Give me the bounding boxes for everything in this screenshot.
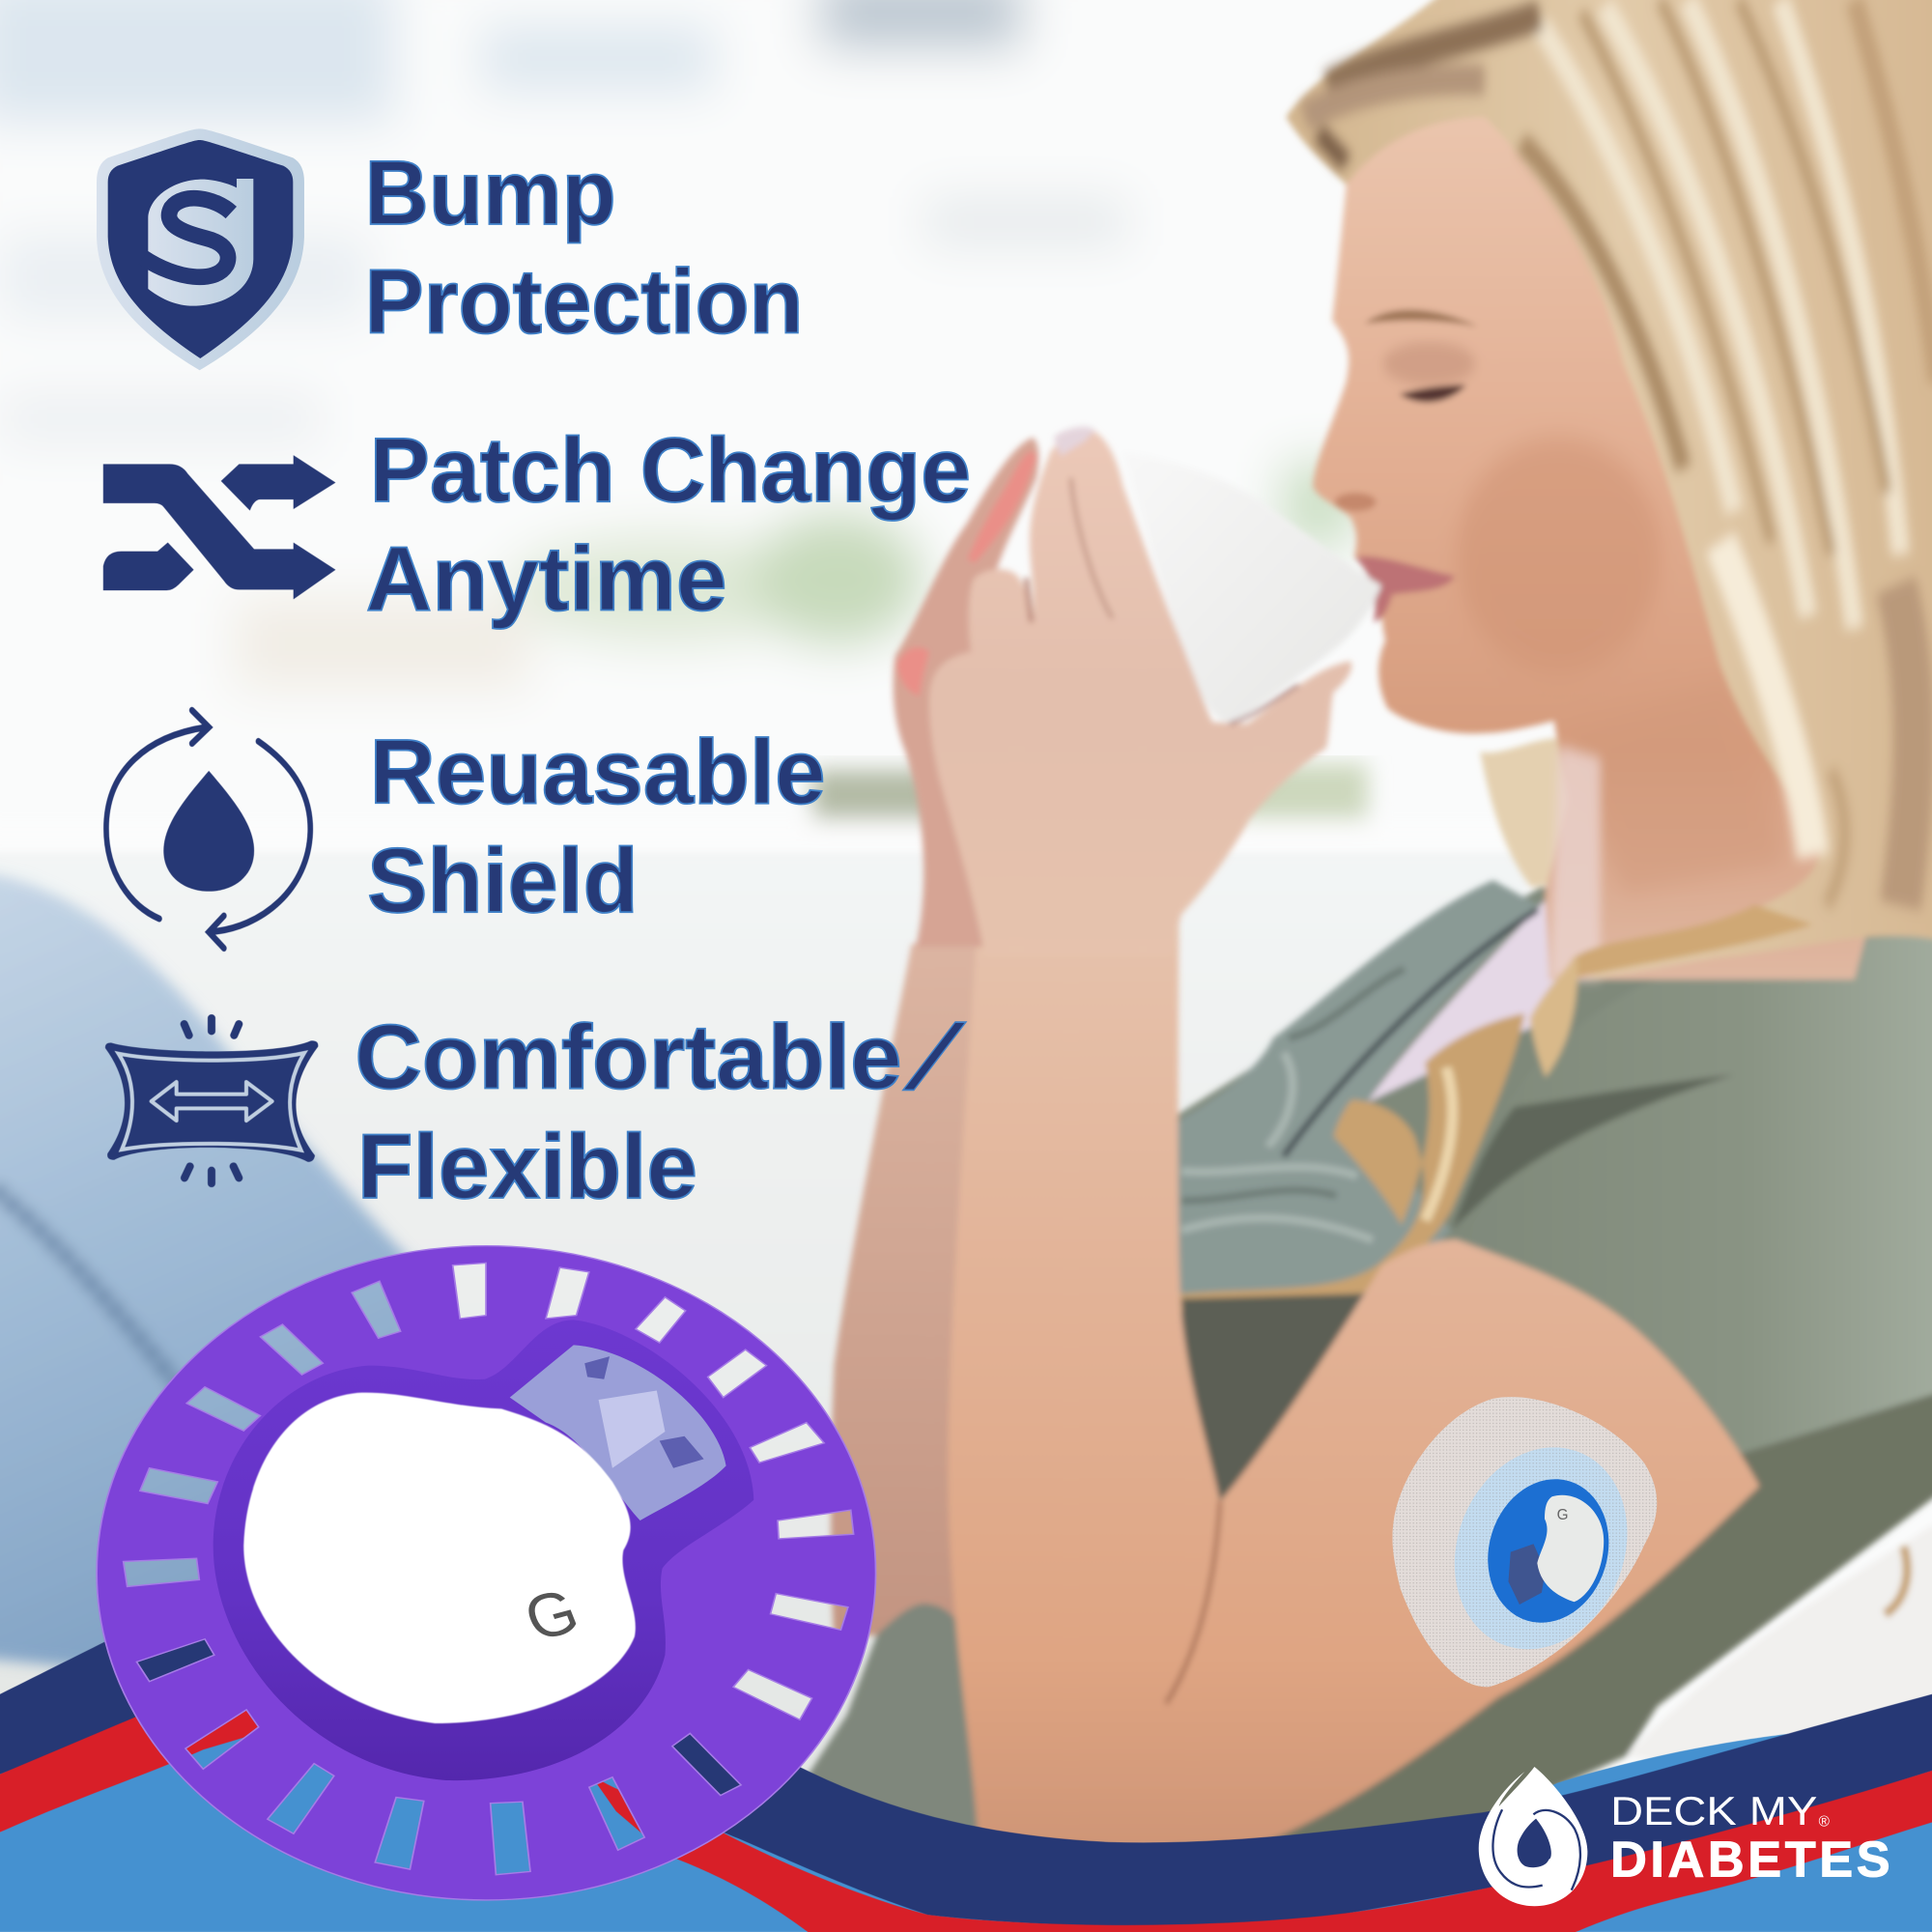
heading line 2: Shield <box>367 831 639 932</box>
raised rim <box>213 1320 753 1780</box>
mug <box>1122 452 1381 724</box>
icon: cycle with drop <box>106 710 310 949</box>
dark shirt under arm <box>1181 1293 1381 1548</box>
heading line 2: Flexible <box>357 1117 697 1218</box>
icon: stretch pillow <box>105 1018 318 1183</box>
jeans <box>0 872 425 1676</box>
light blue ring <box>1425 1421 1657 1675</box>
lips, eye, brow <box>1355 310 1478 622</box>
far arm <box>831 944 985 1637</box>
sensor logo letter: G <box>515 1576 588 1654</box>
feature: Comfortable / Flexible <box>105 1006 976 1218</box>
adhesive patch <box>1392 1397 1657 1687</box>
hair behind neck <box>1480 738 1577 887</box>
lower shirt <box>804 1604 994 1853</box>
logo: Deck My Diabetes: ® <box>1819 1813 1831 1830</box>
cushion and dark shirt band <box>1233 1386 1932 1861</box>
logo wordmark: DECK MY <box>1610 1788 1817 1833</box>
sensor letter: G <box>1557 1507 1569 1523</box>
feature: Reuasable Shield <box>106 710 826 949</box>
sensor window <box>510 1345 726 1520</box>
heading line 2: Protection <box>365 251 804 353</box>
light blue wave <box>0 1684 1932 1932</box>
dark window <box>1508 1544 1546 1605</box>
arm <box>949 911 1759 1848</box>
slash: / <box>892 1006 976 1108</box>
heading: Patch Change <box>370 420 971 522</box>
logo: Deck My Diabetes <box>1479 1767 1890 1906</box>
arm patch with blue sensor shield <box>1392 1397 1657 1687</box>
icon: shield <box>97 128 304 370</box>
bottom wave bands <box>0 1627 1932 1932</box>
logo: Deck My Diabetes: DIABETES <box>1610 1833 1890 1889</box>
face and neck <box>1313 54 1900 980</box>
heading line 2: Anytime <box>366 528 727 630</box>
purple shield ring with slots <box>97 1246 876 1900</box>
heading: Reuasable <box>370 723 826 824</box>
heading: Comfortable <box>355 1007 902 1108</box>
white sensor <box>1537 1495 1604 1602</box>
product: purple shield with sensor <box>97 1246 876 1900</box>
shirt, collar and strap <box>1174 880 1932 1528</box>
red wave <box>0 1690 1932 1932</box>
hair <box>1286 0 1932 980</box>
hair strands over shirt <box>1179 905 1812 1312</box>
navy wave <box>0 1627 1932 1926</box>
feature: Bump Protection <box>97 128 804 370</box>
blue shield <box>1470 1463 1626 1637</box>
hands <box>894 427 1351 955</box>
white sensor body <box>243 1393 636 1723</box>
icon: shuffle arrows <box>103 455 335 599</box>
logo drop <box>1479 1767 1587 1906</box>
heading: Bump <box>365 143 616 244</box>
feature: Patch Change Anytime <box>103 420 971 630</box>
weave texture <box>1392 1397 1657 1687</box>
